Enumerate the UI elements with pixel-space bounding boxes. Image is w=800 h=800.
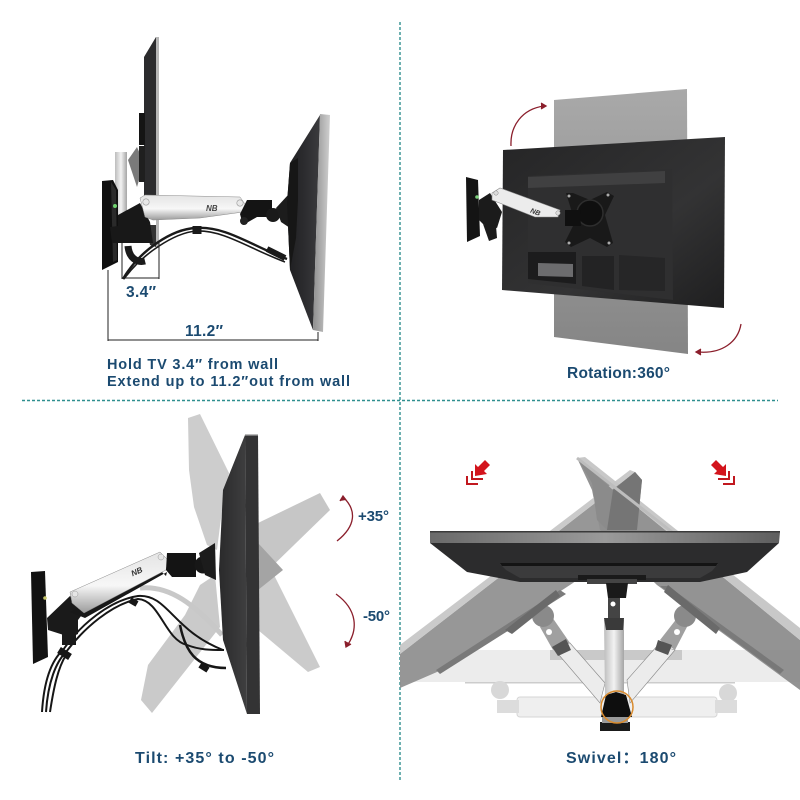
ghost monitor tilted down: [141, 575, 220, 713]
icon: red arrow right: [711, 460, 734, 484]
silver arm with logo: NB: [130, 565, 144, 578]
arrow: tilt up: [337, 496, 353, 541]
label: -50: -50°: [363, 608, 390, 625]
arrow: tilt down: [336, 594, 354, 647]
arm elbow joint: [240, 195, 290, 228]
extended monitor: [287, 114, 330, 332]
silver arm: [492, 188, 560, 218]
caption: wall distance: Extend up to 11.2″out from wall: [107, 374, 350, 390]
panel: swivel: [400, 457, 800, 767]
ghost swivelled monitor left: [400, 470, 642, 688]
caption: tilt: Tilt: +35° to -50°: [135, 750, 274, 767]
ghost screen front down: [258, 543, 320, 672]
ghost centered monitor behind: [400, 650, 800, 684]
ghost back panels overlap: [577, 458, 672, 532]
ghost screen front up: [258, 493, 330, 580]
dimension: 11.2 inch: 11.2″: [185, 323, 224, 340]
cables: [123, 226, 287, 279]
dimension: 3.4 inch: 3.4″: [126, 284, 157, 301]
panel: rotation: [466, 89, 741, 382]
rear monitor in folded position: [128, 37, 159, 248]
front monitor back: [502, 137, 725, 308]
dimension: 3.4 inch: [122, 243, 159, 301]
ghost overlap: [258, 543, 283, 590]
right swivel arm: [627, 585, 720, 703]
arrow: rotate upward: [511, 103, 546, 146]
vertical dashed divider: [399, 22, 401, 780]
ghost cable: [140, 588, 222, 635]
VESA plate and ball joint: [565, 192, 614, 247]
arrow: rotate downward: [696, 324, 741, 355]
wall plate: [31, 571, 48, 664]
dimension: 11.2 inch: [108, 270, 318, 341]
panel: tilt: [31, 414, 390, 767]
black arm base: [110, 203, 153, 243]
cables: [42, 596, 226, 712]
silver arm with logo: [140, 195, 247, 220]
caption: wall distance: Hold TV 3.4″ from wall: [107, 357, 278, 373]
panel: wall distance: [102, 37, 350, 390]
VESA mount and head: [578, 575, 646, 620]
left swivel arm: [505, 590, 605, 703]
caption: swivel: Swivel：180°: [566, 750, 676, 767]
base and highlight ring: [600, 691, 633, 731]
main monitor: [219, 434, 260, 714]
caption: rotation: Rotation:360°: [567, 365, 670, 382]
main monitor from above: [430, 531, 780, 582]
ghost monitor tilted up: [188, 414, 229, 550]
horizontal dashed divider: [22, 400, 778, 402]
icon: red arrow left: [467, 460, 490, 484]
ghost arm lower: [491, 681, 737, 717]
label: +35: +35°: [358, 508, 389, 525]
wall plate and bracket: [466, 177, 502, 242]
silver arm: NB: [529, 208, 541, 218]
center silver arm: [604, 618, 624, 698]
caption: wall distance: [107, 357, 350, 390]
silver arm with logo: NB: [206, 204, 218, 213]
wall plate: [102, 180, 118, 270]
black bracket: [47, 570, 167, 645]
elbow and ball joint: [166, 543, 216, 580]
rotated monitor ghost: [554, 89, 688, 354]
silver pole behind rear monitor: [115, 152, 127, 218]
ghost swivelled monitor right: [577, 457, 800, 690]
silver arm with logo: [70, 552, 168, 613]
